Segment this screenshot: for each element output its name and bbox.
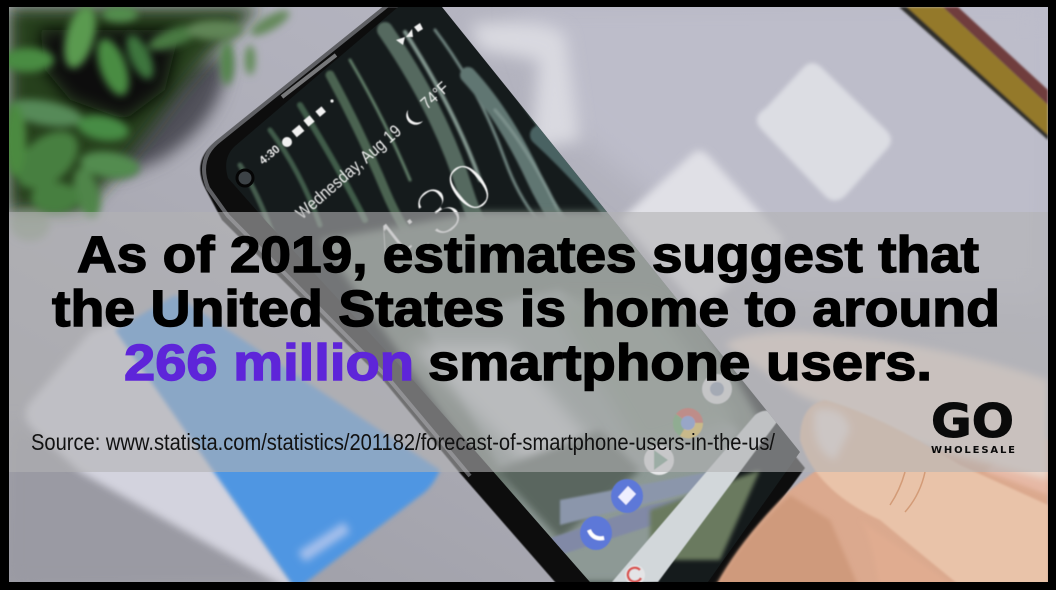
dock pill xyxy=(612,411,780,582)
paper and blue card xyxy=(26,295,440,590)
hand xyxy=(714,332,1048,590)
camera hole xyxy=(237,170,253,186)
headline line 3 with highlighted figure: 266 million xyxy=(124,334,414,391)
plant xyxy=(2,2,293,241)
earbuds xyxy=(470,22,580,150)
translucent text band xyxy=(9,212,1048,472)
white box xyxy=(757,63,891,201)
pencil xyxy=(899,7,1048,140)
plant pot xyxy=(100,55,228,178)
headline line 2: the United States is home to around xyxy=(52,280,1000,337)
headline line 1: As of 2019, estimates suggest that xyxy=(77,226,979,283)
source citation: Source: www.statista.com/statistics/201182/forecast-of-smartphone-users-in-the-us/ xyxy=(31,429,776,455)
clock: 4:30 xyxy=(353,144,509,290)
status bar and date text: Wednesday, Aug 19 xyxy=(292,121,405,223)
logo: GO Wholesale: GO xyxy=(931,394,1014,448)
status bar and date text: 74°F xyxy=(417,78,453,113)
phone xyxy=(200,5,820,590)
app icons xyxy=(580,374,732,585)
headline xyxy=(52,226,1000,391)
status bar and date text: 4:30 xyxy=(257,143,283,167)
phone screen xyxy=(200,7,820,587)
logo: GO Wholesale: WHOLESALE xyxy=(931,445,1015,456)
status bar and date text xyxy=(257,23,453,223)
headline line 3 with highlighted figure: smartphone users. xyxy=(428,334,932,391)
